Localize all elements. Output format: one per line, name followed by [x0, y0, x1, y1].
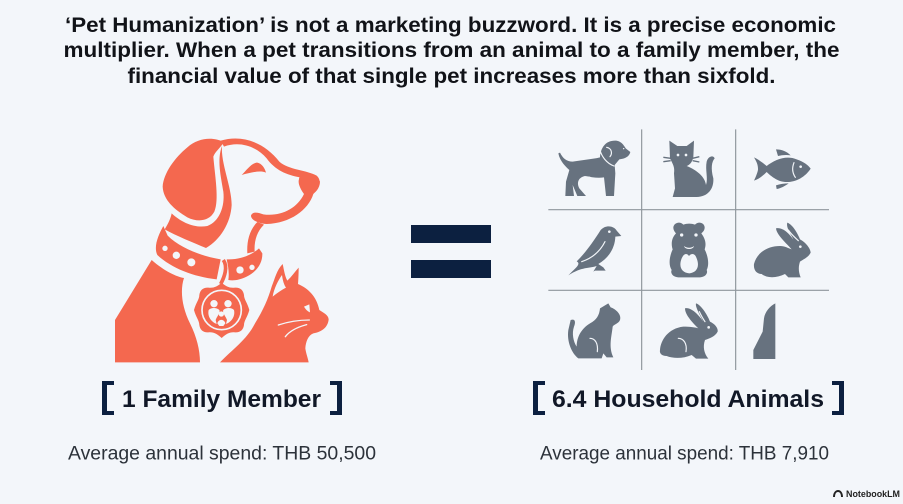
icon: dog and cat with family medal: [115, 139, 329, 362]
cat eye and whiskers: [304, 304, 310, 312]
label: 6.4 household animals: 6.4 Household Animals: [552, 386, 824, 413]
icon: sitting cat: [568, 303, 620, 358]
dog eye: [242, 163, 266, 175]
dog ear: [163, 139, 224, 220]
icon: hamster: [670, 223, 708, 277]
title: multiplier. When a pet transitions from an animal to a family member, the: [64, 39, 840, 62]
label: 1 family member: [102, 381, 342, 415]
grid lines: [548, 129, 829, 370]
title: ‘Pet Humanization’ is not a marketing buzzword. It is a precise economic: [65, 14, 836, 37]
cat: [220, 264, 329, 362]
dog collar: [156, 226, 262, 280]
dog throat: [247, 222, 264, 253]
dog body: [115, 260, 200, 362]
label: 6.4 household animals: [533, 381, 844, 415]
title: [64, 14, 840, 88]
dog neck: [165, 146, 232, 248]
equals sign: [411, 225, 491, 278]
icon: cropped animal: [753, 303, 775, 359]
watermark: NotebookLM: NotebookLM: [846, 489, 900, 500]
grid icon highlights: [580, 147, 798, 352]
medal: [194, 283, 249, 338]
icon: cat: [669, 141, 715, 197]
icon: bird: [568, 226, 621, 275]
medal family figures: [208, 300, 234, 326]
icon: rabbit: [754, 223, 811, 277]
label: 1 family member: 1 Family Member: [122, 386, 321, 413]
text: family member spend: Average annual spend: THB 50,500: [68, 444, 376, 464]
cat inner ear: [273, 275, 286, 297]
icon: dog: [558, 141, 630, 196]
animal grid: [548, 129, 829, 370]
icon: fish: [754, 157, 811, 182]
medal ring link: [221, 260, 226, 284]
icon: rabbit 2: [660, 303, 718, 359]
text: household animal spend: Average annual spend: THB 7,910: [540, 444, 829, 464]
dog head outline: [221, 139, 320, 224]
dog nose: [299, 175, 320, 195]
title: financial value of that single pet increases more than sixfold.: [128, 65, 776, 88]
